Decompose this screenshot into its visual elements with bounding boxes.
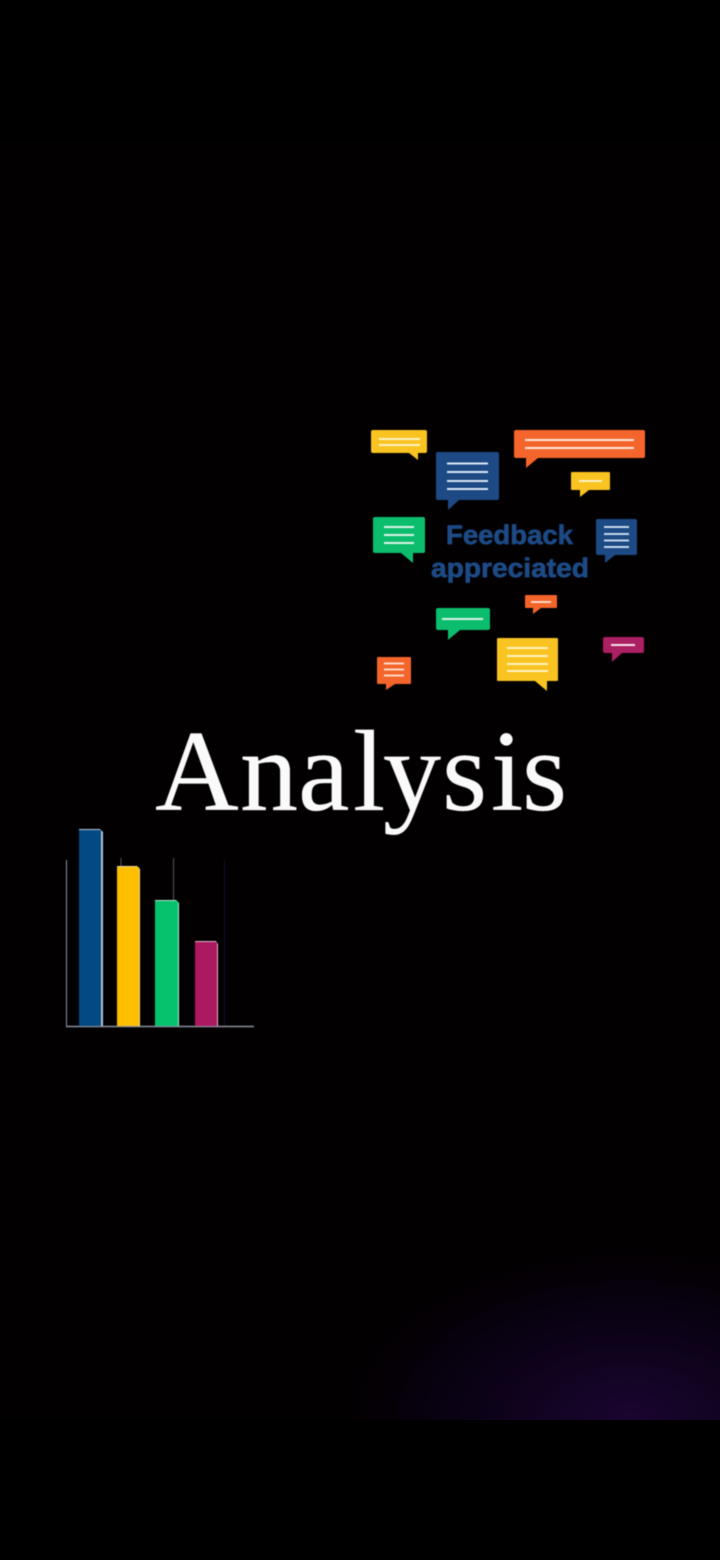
- icon: small orange speech bubble: [377, 657, 411, 690]
- bar: green: [155, 900, 179, 1026]
- title: Analysis: Analysis: [155, 708, 567, 836]
- chart axes and grid lines: [66, 858, 254, 1026]
- icon: green speech bubble: [373, 517, 425, 563]
- icon: blue speech bubble: [436, 452, 499, 510]
- bar chart: [66, 829, 254, 1026]
- icon: large yellow speech bubble: [497, 638, 558, 691]
- icon: small yellow speech bubble: [571, 472, 610, 497]
- icon: magenta speech bubble: [603, 637, 644, 662]
- feedback speech bubbles cluster: [371, 430, 645, 691]
- bar: yellow: [117, 866, 140, 1026]
- heading: Feedback appreciated: [431, 520, 589, 583]
- bar: blue: [79, 829, 103, 1026]
- icon: tiny orange speech bubble: [525, 595, 557, 614]
- icon: orange wide speech bubble: [514, 430, 645, 468]
- heading: Feedback appreciated: Feedback: [446, 520, 574, 550]
- heading: Feedback appreciated: appreciated: [431, 553, 589, 583]
- icon: small blue speech bubble: [596, 519, 637, 563]
- bar: magenta: [195, 941, 218, 1026]
- icon: yellow speech bubble top left: [371, 430, 427, 460]
- icon: green wide speech bubble: [436, 608, 490, 640]
